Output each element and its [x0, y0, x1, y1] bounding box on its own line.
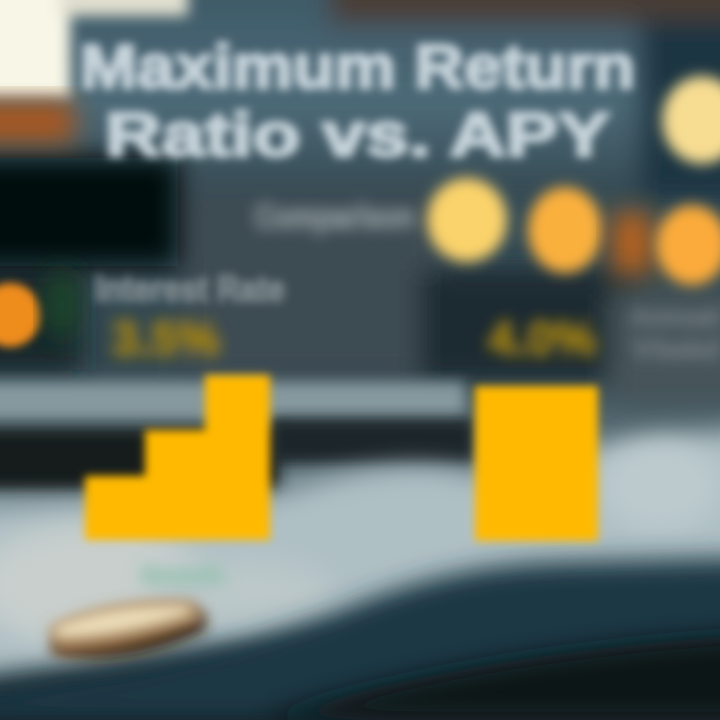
light: orange left	[0, 283, 41, 347]
decorative lights	[0, 76, 720, 347]
light horizontal band	[0, 382, 465, 420]
light: pale upper right	[662, 76, 720, 164]
left metric label: Interest Rate	[95, 268, 285, 309]
white highlight, upper left	[0, 0, 188, 98]
light: amber	[528, 187, 602, 273]
dark horizontal band	[0, 428, 280, 490]
small green caption: Growth	[140, 560, 225, 590]
staircase bar chart	[85, 375, 270, 540]
right metric value: 4.0%	[488, 313, 596, 366]
title: Ratio vs. APY	[105, 101, 610, 170]
subtitle: Comparison	[255, 198, 415, 236]
light: green glow	[46, 271, 78, 339]
coin	[50, 602, 205, 658]
dark shadow block, upper left	[0, 158, 178, 266]
right side note	[630, 304, 720, 364]
light: amber right	[656, 205, 720, 285]
pale marble surface	[0, 428, 720, 680]
title	[80, 33, 635, 170]
title: Maximum Return	[80, 33, 635, 102]
right side note: Yield	[630, 337, 720, 364]
right side note: Annual	[630, 304, 720, 331]
light: orange glow	[612, 212, 652, 274]
solid bar	[475, 386, 598, 541]
left metric value: 3.5%	[112, 313, 220, 366]
dark foreground curve	[0, 557, 720, 720]
light: yellow	[427, 178, 507, 262]
orange glow, left	[0, 102, 74, 142]
